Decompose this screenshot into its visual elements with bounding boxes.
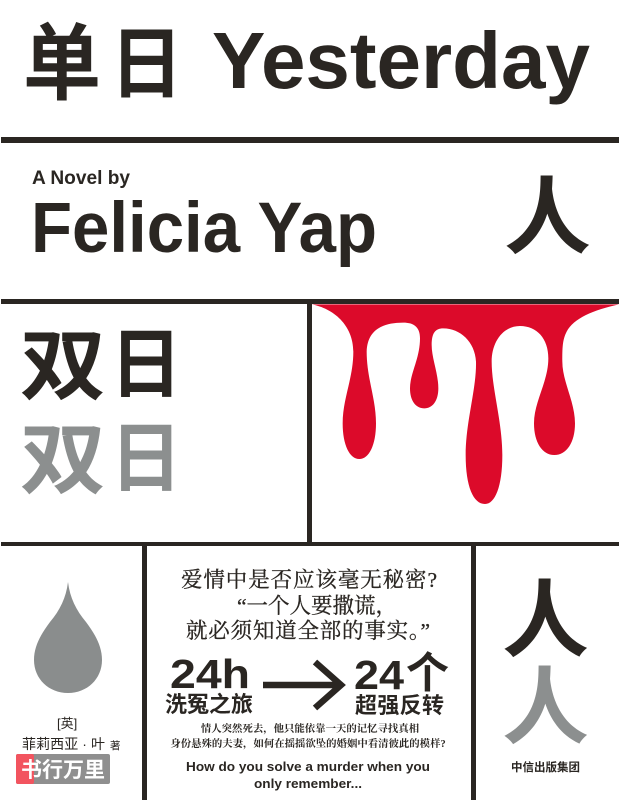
title: Chinese 单日: 单 [23, 17, 101, 111]
characters: grey 双日: 双 [20, 416, 106, 504]
left stat: 24h: 24h [170, 651, 250, 697]
arrow [263, 662, 341, 708]
English tagline [186, 759, 430, 791]
synopsis text: 情人突然死去，他只能依靠一天的记忆寻找真相 [201, 722, 419, 735]
author credit: Chinese: [英] [57, 716, 77, 731]
publisher: 中信出版集团 [511, 760, 580, 774]
right stat: 24个: 超强反转 [355, 693, 444, 718]
author credit: Chinese: 菲莉西亚 · 叶 [22, 736, 105, 752]
tagline: main question and quote: 爱情中是否应该毫无秘密? [181, 568, 437, 592]
English tagline: How do you solve a murder when you [186, 759, 430, 774]
left stat: 24h: 洗冤之旅 [165, 692, 253, 717]
characters: grey 双日: 日 [110, 417, 182, 502]
synopsis text [170, 722, 446, 750]
left stat: 24h [165, 651, 253, 717]
character: black 人: 人 [502, 574, 589, 668]
character: grey 人: 人 [502, 661, 589, 755]
character: 人: 人 [504, 171, 591, 265]
English tagline: only remember... [254, 776, 362, 791]
illustration: red blood drips [312, 304, 619, 504]
characters: black 双日: 日 [110, 323, 182, 408]
title: Chinese 单日: 日 [110, 20, 183, 108]
watermark: 书行万里 [21, 754, 105, 784]
icon: grey drop [34, 582, 102, 693]
right stat: 24个 [354, 650, 449, 718]
tagline: main question and quote [181, 568, 437, 643]
characters: black 双日 [20, 322, 182, 410]
author credit: Chinese [22, 716, 120, 752]
tagline: main question and quote: 就必须知道全部的事实。” [186, 619, 430, 643]
author name: Felicia Yap: Felicia Yap [31, 189, 377, 268]
tagline: main question and quote: “一个人要撒谎， [237, 594, 397, 619]
author credit: Chinese: 著 [110, 739, 120, 752]
right stat: 24个: 个 [406, 650, 449, 698]
author line: A Novel by: A Novel by [32, 168, 130, 189]
right stat: 24个: 24 [354, 652, 404, 698]
synopsis text: 身份悬殊的夫妻，如何在摇摇欲坠的婚姻中看清彼此的模样? [170, 737, 446, 750]
characters: black 双日: 双 [20, 322, 106, 410]
title: Yesterday: Yesterday [212, 16, 591, 105]
characters: grey 双日 [20, 416, 182, 504]
title: Chinese 单日 [23, 17, 183, 111]
